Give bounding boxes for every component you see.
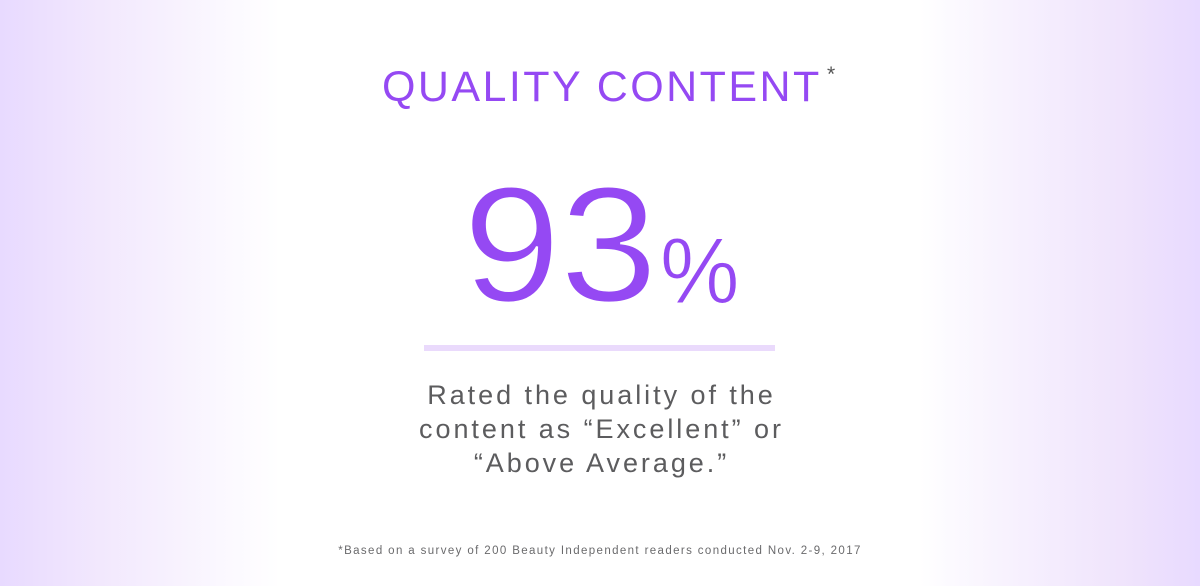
title text: QUALITY CONTENT xyxy=(382,63,822,111)
big statistic xyxy=(463,153,739,336)
asterisk: * xyxy=(827,63,835,86)
description text: “Above Average.” xyxy=(474,448,729,478)
description text xyxy=(419,380,784,478)
percent sign: % xyxy=(660,218,739,323)
description text: content as “Excellent” or xyxy=(419,414,784,444)
footnote: *Based on a survey of 200 Beauty Independent readers conducted Nov. 2-9, 2017 xyxy=(338,545,862,557)
description text: Rated the quality of the xyxy=(427,380,776,410)
number 93: 93 xyxy=(463,153,657,336)
divider bar xyxy=(424,345,775,351)
